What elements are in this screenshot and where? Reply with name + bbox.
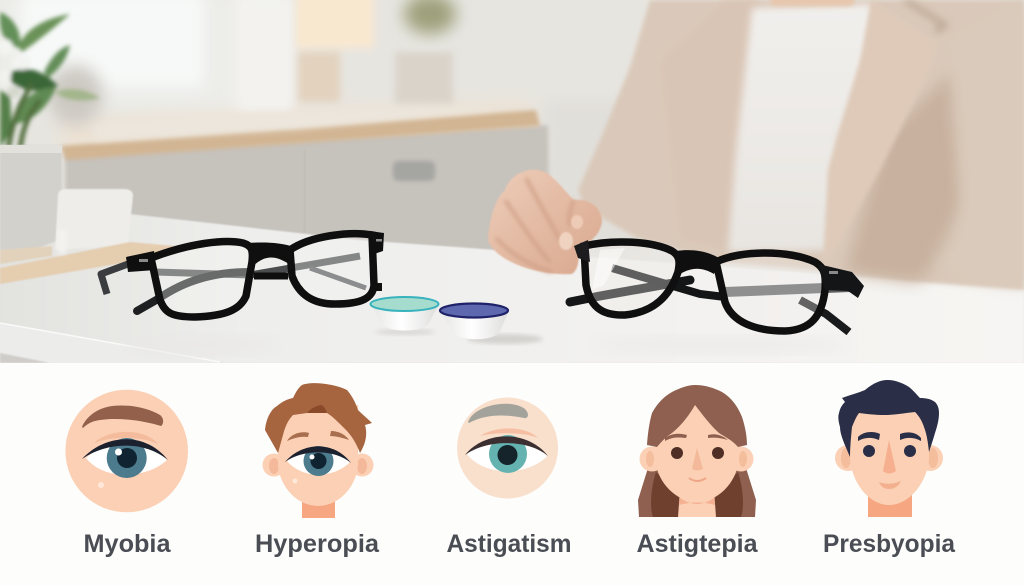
icon: hyperopia face xyxy=(262,383,374,518)
label: Astigtepia: Astigtepia xyxy=(636,530,759,558)
label: Presbyopia: Presbyopia xyxy=(823,530,956,558)
person in beige blazer xyxy=(578,0,1024,290)
eyeglasses, right xyxy=(570,240,864,332)
background vase and plant xyxy=(395,0,456,104)
contact lens case, navy xyxy=(440,304,543,344)
background lamp xyxy=(240,0,374,110)
icon: myobia eye xyxy=(65,390,188,512)
eyeglasses, left xyxy=(101,231,384,317)
contact lens case, teal xyxy=(370,297,438,335)
person's hand xyxy=(488,170,602,274)
panel: photo of glasses and contact lens cases xyxy=(0,0,1024,363)
temple arms xyxy=(101,256,382,311)
label: Myobia: Myobia xyxy=(84,530,172,558)
temple arms xyxy=(570,268,850,332)
panel: vision condition icons xyxy=(0,363,1024,585)
label: Hyperopia: Hyperopia xyxy=(255,530,380,558)
icon: astigmatism eye xyxy=(457,398,558,498)
icon: presbyopia face xyxy=(835,380,943,517)
table top xyxy=(0,214,1024,363)
lenses and frame xyxy=(584,242,679,315)
potted plant xyxy=(0,12,103,251)
tray and white cup xyxy=(0,189,175,284)
lenses and frame xyxy=(151,242,252,317)
wooden counter and grey cabinet xyxy=(60,108,550,255)
icon: astigtepia face xyxy=(638,385,756,517)
label: Astigatism: Astigatism xyxy=(446,530,572,558)
room background xyxy=(0,0,1024,363)
